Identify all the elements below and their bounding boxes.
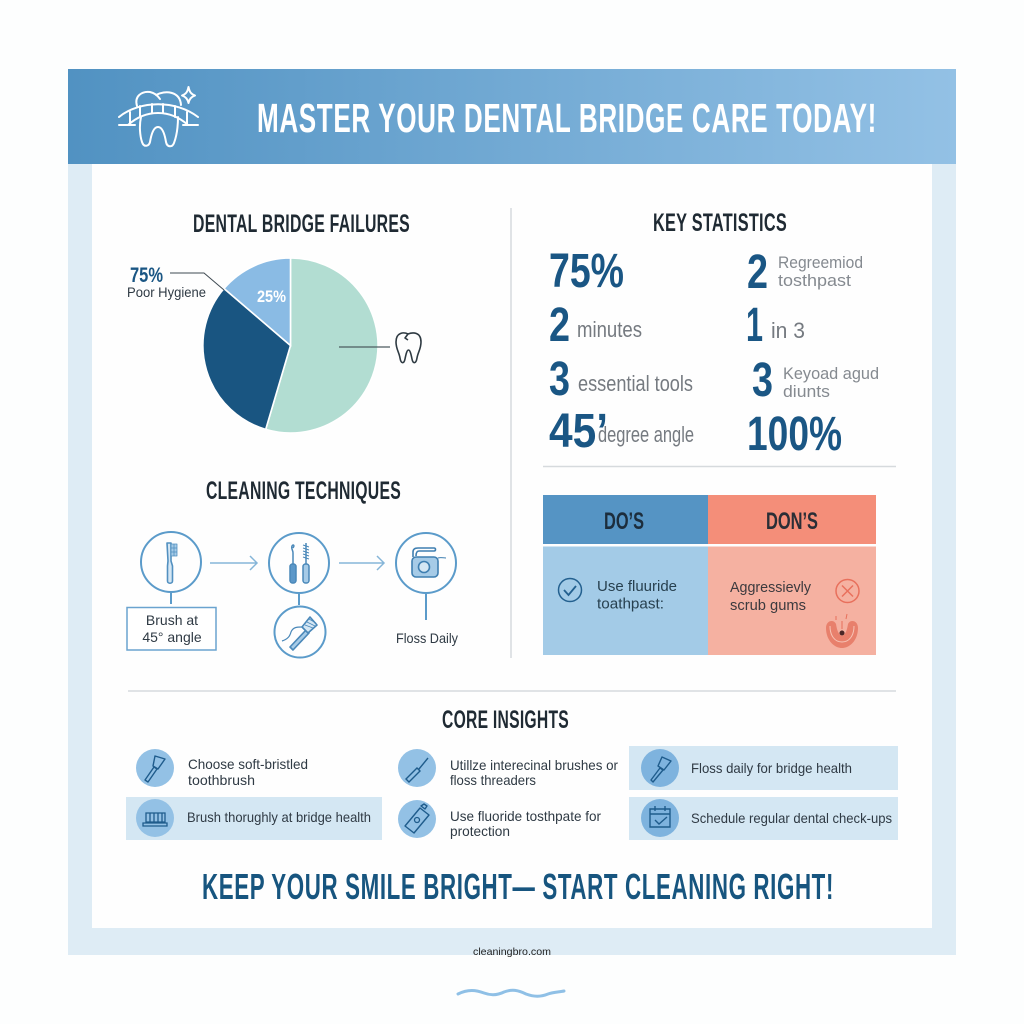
stat: 2 minutes bbox=[549, 299, 642, 352]
arrow bbox=[210, 556, 257, 570]
pie chart bbox=[203, 258, 378, 433]
label box: brush at 45 degrees bbox=[127, 608, 216, 650]
do's header bbox=[543, 495, 708, 544]
heading: DENTAL BRIDGE FAILURES bbox=[193, 210, 410, 238]
panel: key statistics bbox=[549, 209, 879, 461]
insight: soft-bristled toothbrush: toothbrush bbox=[188, 772, 255, 788]
stat: 2 recommended toothpaste bbox=[747, 246, 863, 299]
don'ts body: Aggressievly bbox=[730, 579, 811, 596]
don'ts body: scrub gums bbox=[730, 597, 806, 614]
pie label: 25%: 25% bbox=[257, 287, 286, 306]
stat: 1 in 3 bbox=[746, 299, 805, 352]
website credit: cleaningbro.com bbox=[473, 946, 551, 958]
insight: floss daily: Floss daily for bridge health bbox=[691, 760, 852, 776]
insight: dental check-ups: Schedule regular dental check-ups bbox=[691, 810, 892, 826]
stat: 45 degree angle: 45’ bbox=[549, 405, 608, 458]
stat: 3 key points: 3 bbox=[752, 354, 773, 407]
callout line bbox=[339, 346, 390, 348]
callout: 75% poor hygiene bbox=[127, 264, 224, 300]
highlight band bbox=[629, 797, 898, 840]
insight: interdental brushes bbox=[398, 749, 618, 788]
label: floss daily: Floss Daily bbox=[396, 630, 458, 646]
insight: fluoride toothpaste: protection bbox=[450, 823, 510, 839]
outer frame bbox=[68, 69, 956, 955]
highlight band bbox=[629, 746, 898, 790]
step circles and connectors bbox=[141, 532, 456, 658]
label box: brush at 45 degrees: 45° angle bbox=[142, 629, 202, 645]
insight: soft-bristled toothbrush: Choose soft-bristled bbox=[188, 756, 308, 772]
stat: 45 degree angle: degree angle bbox=[598, 422, 694, 447]
icon: floss box bbox=[412, 548, 446, 577]
callout: 75% poor hygiene: Poor Hygiene bbox=[127, 284, 206, 300]
insight: dental check-ups bbox=[641, 799, 892, 837]
callout: 75% poor hygiene: 75% bbox=[130, 264, 163, 287]
icon: tooth with bridge bbox=[119, 87, 198, 146]
do's body bbox=[543, 546, 708, 655]
label box: brush at 45 degrees: Brush at bbox=[146, 612, 198, 628]
divider lines bbox=[128, 208, 896, 691]
stat: 3 essential tools: 3 bbox=[549, 353, 570, 406]
stat: 3 essential tools bbox=[549, 353, 693, 406]
decorative wave bbox=[458, 990, 564, 996]
icon: interdental brushes bbox=[290, 543, 309, 583]
heading: CORE INSIGHTS bbox=[442, 706, 569, 734]
stat: 3 essential tools: essential tools bbox=[578, 371, 693, 396]
do's body: Use fluuride bbox=[597, 578, 677, 595]
don'ts header: DON’S bbox=[766, 508, 818, 535]
panel: dental bridge failures bbox=[127, 210, 421, 433]
insight: brush thoroughly bbox=[136, 799, 371, 837]
stat: 2 recommended toothpaste: 2 bbox=[747, 246, 768, 299]
don'ts body bbox=[708, 546, 876, 655]
stat: 1 in 3: 1 bbox=[746, 299, 763, 352]
insight: soft-bristled toothbrush bbox=[136, 749, 308, 788]
do's header: DO’S bbox=[604, 508, 644, 535]
icon: toothbrush bbox=[167, 543, 177, 583]
stat: 3 key points: Keyoad agud bbox=[783, 364, 879, 383]
insight: fluoride toothpaste: Use fluoride tosthpate for bbox=[450, 808, 601, 824]
highlight band bbox=[126, 797, 382, 840]
panel: cleaning techniques bbox=[127, 477, 458, 658]
panel: core insights bbox=[126, 706, 898, 840]
stat: 2 recommended toothpaste: tosthpast bbox=[778, 271, 851, 290]
icon: irritated gum bbox=[826, 614, 858, 648]
don'ts header bbox=[708, 495, 876, 544]
stat: 1 in 3: in 3 bbox=[771, 318, 805, 343]
stat: 3 key points: diunts bbox=[783, 382, 830, 401]
arrow bbox=[339, 556, 384, 570]
icon: flossing brush bbox=[282, 617, 317, 650]
stat: 100%: 100% bbox=[747, 408, 842, 461]
white content panel bbox=[92, 164, 932, 928]
heading: CLEANING TECHNIQUES bbox=[206, 477, 401, 505]
icon: check bbox=[558, 578, 582, 602]
insight: brush thoroughly: Brush thorughly at bridge health bbox=[187, 809, 371, 825]
panel: do's and don'ts bbox=[543, 495, 876, 655]
stat: 3 key points bbox=[752, 354, 879, 407]
insight: interdental brushes: floss threaders bbox=[450, 772, 536, 788]
stat: 75%: 75% bbox=[549, 245, 624, 298]
icon: cross bbox=[836, 580, 859, 602]
header banner bbox=[68, 69, 956, 164]
heading: KEY STATISTICS bbox=[653, 209, 787, 237]
insight: floss daily bbox=[641, 749, 852, 787]
stat: 2 recommended toothpaste: Regreemiod bbox=[778, 253, 863, 272]
stat: 2 minutes: minutes bbox=[577, 317, 642, 342]
icon: tooth bbox=[396, 333, 421, 363]
insight: interdental brushes: Utillze interecinal brushes or bbox=[450, 757, 618, 773]
stat: 2 minutes: 2 bbox=[549, 299, 570, 352]
insight: fluoride toothpaste bbox=[398, 800, 601, 839]
do's body: toathpast: bbox=[597, 596, 664, 612]
stat: 45 degree angle bbox=[549, 405, 694, 458]
